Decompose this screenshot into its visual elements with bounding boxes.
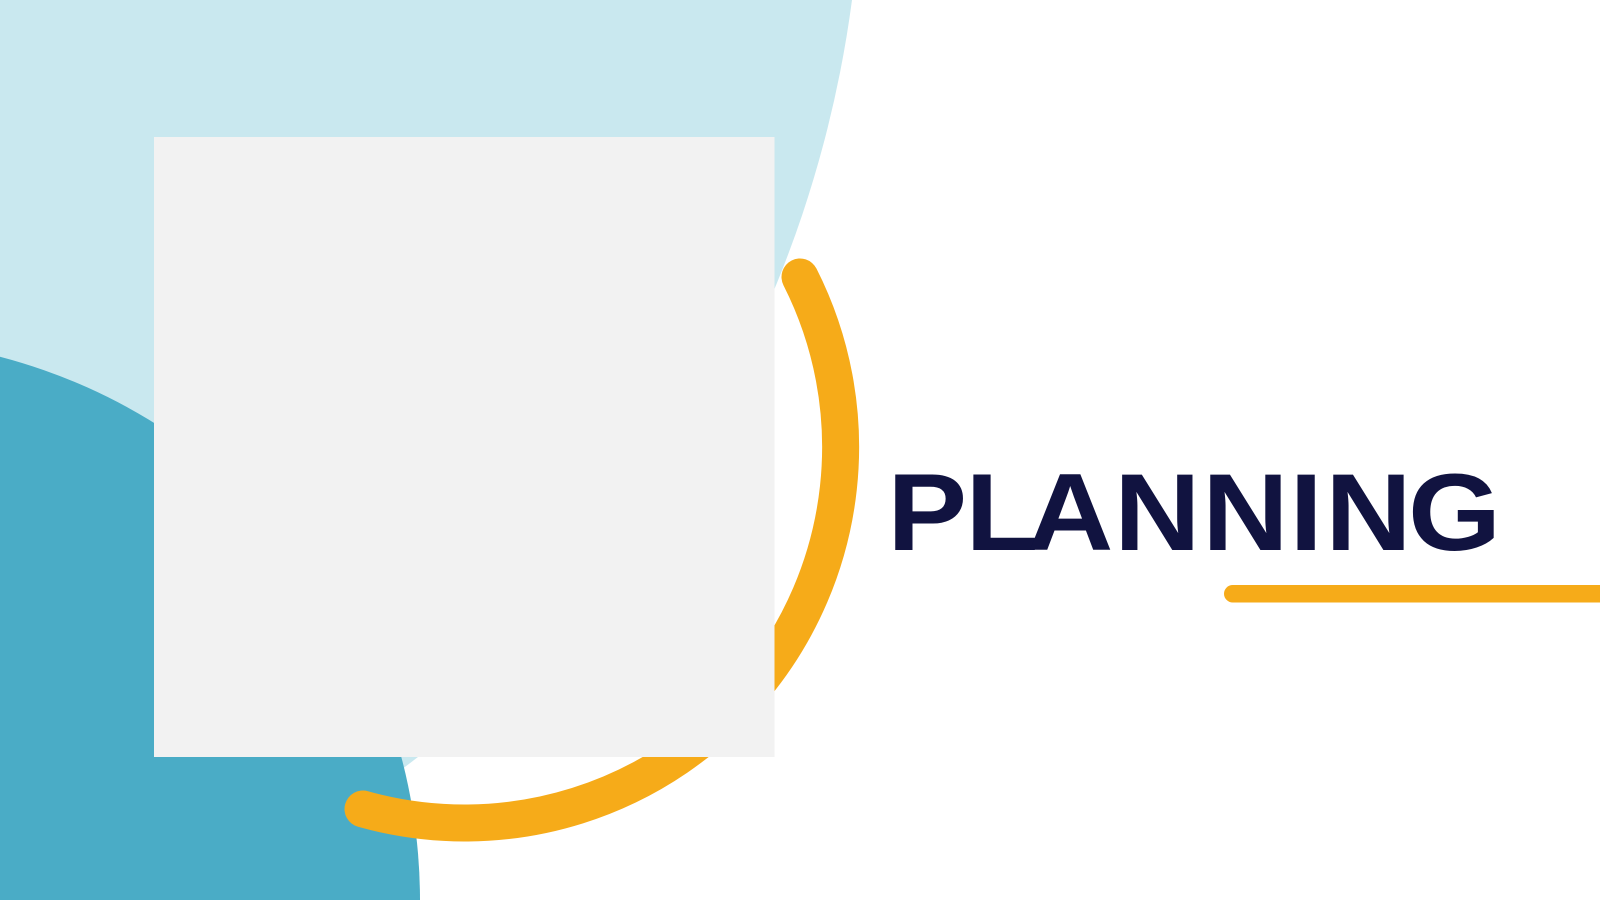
title: PLANNING: PLANNING [887, 452, 1501, 574]
orange circular arc [363, 277, 841, 823]
dark blue background circle [0, 357, 420, 900]
orange accent bar [1224, 585, 1600, 602]
grey image placeholder panel [154, 137, 774, 757]
light blue background circle [0, 0, 852, 900]
